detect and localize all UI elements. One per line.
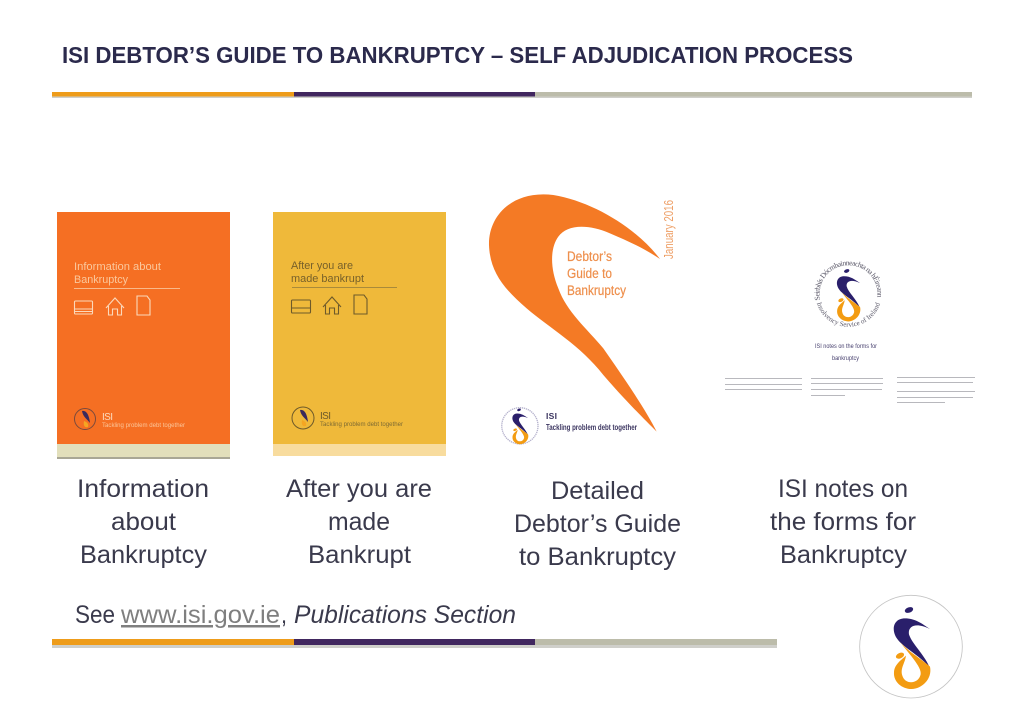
booklet title: Information about: [74, 261, 161, 273]
guide title: Debtor’s: [567, 249, 612, 264]
notes heading: ISI notes on the forms for: [815, 344, 877, 350]
booklet title: Bankruptcy: [74, 274, 128, 286]
booklet footer logo and tagline: [292, 407, 403, 429]
guide footer text: ISI: [546, 411, 557, 421]
booklet footer logo and tagline: Tackling problem debt together: [320, 422, 403, 428]
guide footer text: Tackling problem debt together: [546, 423, 637, 432]
booklet title: made bankrupt: [291, 273, 364, 285]
illegible fine print: [725, 377, 975, 403]
bottom tricolour rule: [52, 639, 777, 648]
publications reference: ,: [281, 601, 287, 629]
guide footer logo: [502, 408, 538, 444]
booklet footer logo and tagline: [74, 408, 185, 430]
publications reference: See: [75, 601, 115, 629]
publications reference: [75, 601, 516, 629]
booklet: debtor's guide to bankruptcy: [489, 194, 676, 444]
booklet icons: [292, 295, 367, 314]
label: after you are made bankrupt: made: [328, 508, 390, 536]
booklet title: After you are: [291, 260, 353, 272]
label: information about bankruptcy: Information: [77, 475, 209, 503]
label: ISI notes on the forms: the forms for: [770, 508, 916, 536]
booklet: after you are made bankrupt: [273, 212, 446, 456]
label: after you are made bankrupt: Bankrupt: [308, 541, 411, 569]
label: detailed debtor's guide: Debtor’s Guide: [514, 510, 681, 538]
label: detailed debtor's guide: to Bankruptcy: [519, 543, 677, 571]
document: ISI notes on the forms: [725, 260, 975, 403]
booklet: information about bankruptcy: [57, 212, 230, 459]
circular seal logo: Seirbhís Dócmhainneachta na hÉireann: [814, 260, 881, 300]
label: after you are made bankrupt: After you are: [286, 475, 432, 503]
publications reference: www.isi.gov.ie: [120, 601, 280, 629]
booklet icons: [74, 296, 150, 315]
booklet footer logo and tagline: ISI: [320, 411, 331, 422]
circular seal logo: [814, 260, 881, 327]
title: ISI DEBTOR’S GUIDE TO BANKRUPTCY – SELF ADJUDICATION PROCESS: [62, 42, 853, 68]
label: ISI notes on the forms: ISI notes on: [778, 475, 908, 503]
label: information about bankruptcy: Bankruptcy: [80, 541, 208, 569]
circular seal logo: Insolvency Service of Ireland: [816, 302, 880, 327]
guide title: Bankruptcy: [567, 283, 626, 298]
guide title: Guide to: [567, 266, 612, 281]
label: information about bankruptcy: about: [111, 508, 176, 536]
label: detailed debtor's guide: Detailed: [551, 477, 644, 505]
top tricolour rule: [52, 92, 972, 98]
label: ISI notes on the forms: Bankruptcy: [780, 541, 908, 569]
booklet footer logo and tagline: ISI: [102, 412, 113, 423]
notes heading: bankruptcy: [832, 356, 859, 362]
publications reference: Publications Section: [294, 601, 516, 629]
ISI logo badge: [860, 595, 962, 698]
guide date: January 2016: [662, 200, 676, 259]
orange swoosh: [489, 194, 660, 432]
booklet footer logo and tagline: Tackling problem debt together: [102, 423, 185, 429]
